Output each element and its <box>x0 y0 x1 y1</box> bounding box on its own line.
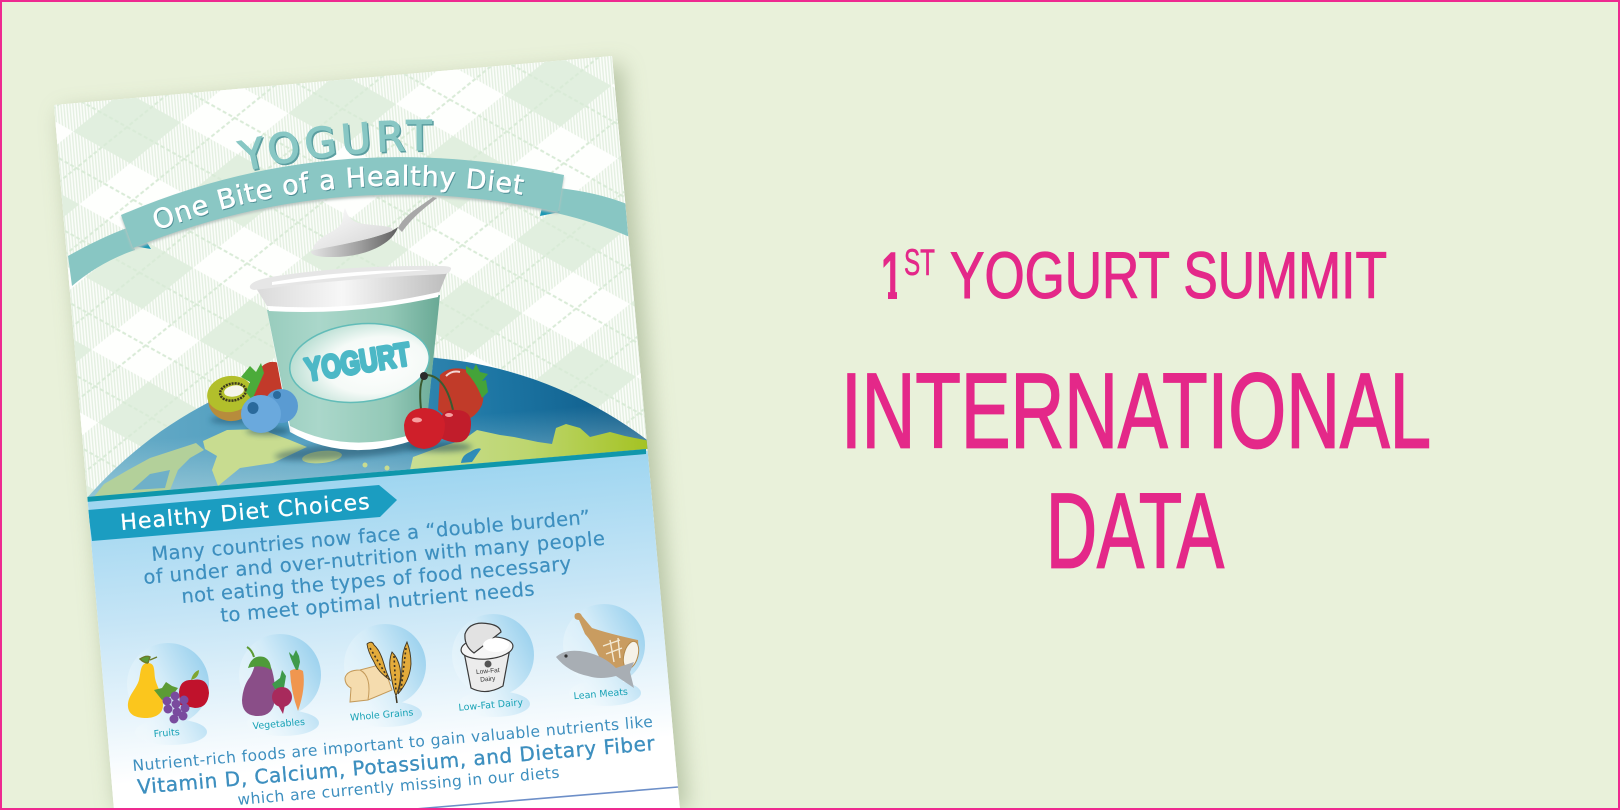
heading: 1st Yogurt Summit: 1 <box>880 239 904 312</box>
icon: kiwi <box>207 376 250 426</box>
intro text block: of under and over-nutrition with many people <box>142 527 606 589</box>
cup label: YOGURT oval <box>289 322 430 404</box>
teal divider band <box>86 449 646 502</box>
section heading: Healthy Diet Choices <box>88 485 397 541</box>
label: Lean Meats: Lean Meats <box>573 687 628 702</box>
paper drop shadow <box>60 64 688 810</box>
food group: Whole Grains <box>344 624 426 727</box>
fruit behind cup <box>204 362 290 425</box>
heading: 1st Yogurt Summit: ST <box>904 242 935 283</box>
label: Fruits: Fruits <box>153 727 180 740</box>
heading: 1st Yogurt Summit <box>884 248 1386 299</box>
spoon with yogurt <box>311 197 437 257</box>
icon: dairy cup: Dairy <box>480 675 496 684</box>
globe <box>88 358 648 497</box>
intro text block <box>142 506 606 627</box>
icon: right strawberry <box>438 364 488 421</box>
yogurt cup <box>250 266 451 465</box>
icon: bread and wheat <box>345 642 411 703</box>
intro text block: not eating the types of food necessary <box>180 552 572 608</box>
ribbon banner with subtitle: One Bite of a Healthy Diet <box>157 166 525 229</box>
food group: Vegetables <box>239 634 321 736</box>
icon: eggplant, beet, carrot <box>242 647 304 716</box>
footer rule <box>415 787 678 809</box>
cup lid <box>250 266 451 312</box>
icon: left strawberry <box>241 362 282 398</box>
icon: dairy cup: Low-Fat <box>476 667 500 676</box>
land masses <box>90 424 650 502</box>
heading: International Data: DATA <box>1046 470 1224 590</box>
fruit in front of cup <box>241 364 488 452</box>
nutrient text block: Vitamin D, Calcium, Potassium, and Dietary Fiber <box>136 731 656 799</box>
label: Whole Grains: Whole Grains <box>350 707 414 724</box>
infographic poster (tilted) <box>54 56 680 808</box>
nutrient text block <box>132 713 656 809</box>
title: YOGURT: YOGURT <box>237 120 434 171</box>
title: YOGURT: YOGURT <box>236 119 432 170</box>
label: Vegetables: Vegetables <box>252 717 305 732</box>
cup label: YOGURT oval: YOGURT <box>302 336 413 388</box>
food group: Lean Meats <box>556 604 645 706</box>
icon: cherries <box>404 372 472 452</box>
intro text block: to meet optimal nutrient needs <box>219 577 535 627</box>
ribbon tails <box>68 188 632 286</box>
food group: Fruits <box>127 643 209 745</box>
icon: blueberries <box>241 389 298 435</box>
nutrient text block: Nutrient-rich foods are important to gain valuable nutrients like <box>132 713 653 775</box>
heading: 1st Yogurt Summit: YOGURT SUMMIT <box>950 238 1387 312</box>
heading: International Data <box>841 350 1431 590</box>
nutrient text block: which are currently missing in our diets <box>237 764 560 809</box>
icon: dairy cup <box>460 623 514 692</box>
blue content section background <box>88 450 680 808</box>
food group: Low-Fat Dairy <box>452 614 534 717</box>
icon: pear, apple, grapes <box>128 656 209 724</box>
ribbon banner with subtitle: One Bite of a Healthy Diet <box>154 164 524 228</box>
intro text block: Many countries now face a “double burden” <box>150 506 591 566</box>
section heading: Healthy Diet Choices: Healthy Diet Choices <box>119 490 371 536</box>
label: Low-Fat Dairy: Low-Fat Dairy <box>458 697 524 714</box>
ribbon banner with subtitle <box>120 157 565 250</box>
poster sheet with argyle background <box>40 40 700 810</box>
icon: ham and fish <box>556 613 641 688</box>
